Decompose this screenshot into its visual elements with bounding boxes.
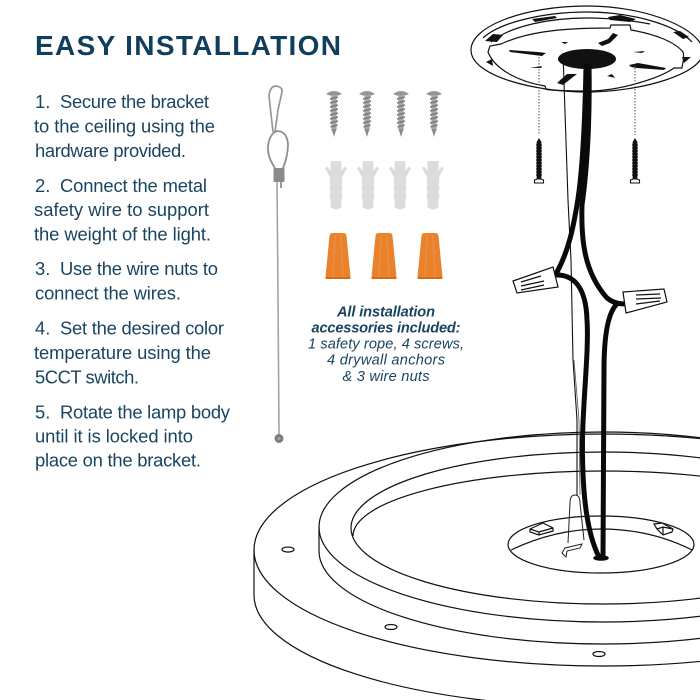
step 2: 2. bbox=[35, 175, 50, 196]
wire nut left bbox=[513, 267, 558, 293]
step 1 bbox=[34, 91, 215, 161]
step 4: Set the desired color bbox=[60, 317, 224, 338]
step 5 bbox=[35, 401, 231, 471]
caption: accessories included: 4 drywall anchors bbox=[327, 352, 445, 368]
icon: three wire nuts bbox=[325, 233, 443, 279]
step 2: the weight of the light. bbox=[34, 224, 211, 245]
step 1: 1. bbox=[35, 91, 50, 112]
ceiling bracket bbox=[471, 6, 700, 92]
step 4 bbox=[34, 317, 224, 387]
lamp mounting holes bbox=[282, 547, 605, 656]
step 5: 5. bbox=[35, 401, 50, 422]
step 1: to the ceiling using the bbox=[34, 116, 215, 136]
safety wire bbox=[562, 53, 584, 557]
step 2 bbox=[34, 175, 211, 245]
step 4: 4. bbox=[35, 317, 50, 338]
wire nut right bbox=[623, 289, 667, 313]
lamp center opening bbox=[508, 516, 694, 573]
caption: accessories included: & 3 wire nuts bbox=[342, 369, 430, 385]
dotted guide lines and ceiling screws bbox=[534, 57, 640, 183]
icon: safety rope bbox=[268, 86, 288, 443]
lamp body bbox=[254, 432, 700, 700]
step 3: connect the wires. bbox=[35, 282, 181, 303]
icon: four screws bbox=[326, 91, 442, 137]
step 3: 3. bbox=[35, 258, 50, 279]
step 4: temperature using the bbox=[34, 342, 211, 363]
step 5: place on the bracket. bbox=[35, 450, 201, 471]
caption: accessories included: accessories included: bbox=[312, 320, 461, 336]
step 2: safety wire to support bbox=[34, 199, 209, 220]
step 1: Secure the bracket bbox=[60, 91, 209, 112]
icon: four drywall anchors bbox=[325, 161, 444, 210]
caption: accessories included: 1 safety rope, 4 screws, bbox=[308, 336, 464, 352]
step 5: until it is locked into bbox=[35, 426, 193, 446]
bracket slots bbox=[485, 15, 691, 85]
caption: accessories included: All installation bbox=[336, 305, 435, 321]
step 1: hardware provided. bbox=[35, 140, 186, 161]
title: EASY INSTALLATION bbox=[35, 30, 341, 61]
step 5: Rotate the lamp body bbox=[60, 401, 231, 422]
step 3: Use the wire nuts to bbox=[60, 258, 218, 279]
step 4: 5CCT switch. bbox=[35, 366, 139, 387]
panel: installation steps bbox=[34, 91, 231, 471]
caption: accessories included bbox=[308, 305, 464, 385]
wires bbox=[557, 66, 624, 560]
step 3 bbox=[35, 258, 218, 303]
step 2: Connect the metal bbox=[60, 175, 207, 196]
